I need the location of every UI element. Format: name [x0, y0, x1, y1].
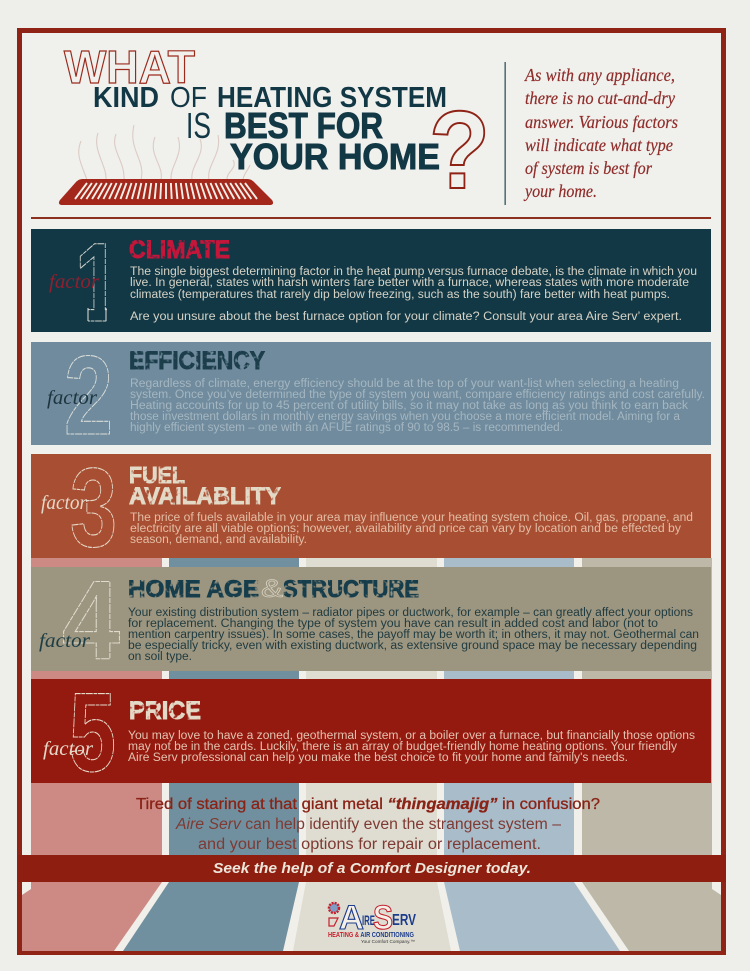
- closing line 2: Aire Serv can help identify even the strangest system –: [175, 816, 561, 833]
- intro text: there is no cut-and-dry: [525, 88, 675, 108]
- body text: [128, 730, 695, 764]
- body text: [130, 378, 705, 434]
- panel: factor 4 home age and structure: [31, 558, 711, 683]
- intro text: answer. Various factors: [525, 112, 678, 132]
- body text: Aire Serv professional can help you make the best choice to fit your home and family's needs.: [128, 752, 628, 764]
- icon: duct shape: [329, 918, 338, 926]
- wordmark: ERV: [392, 912, 416, 929]
- header rule: [31, 217, 711, 219]
- number 4: 4: [62, 558, 120, 683]
- body text: those investment dollars in monthly energy savings when you choose a more efficient model. Aiming for a: [130, 411, 681, 423]
- title line: is best for: IS: [186, 105, 211, 146]
- intro text: As with any appliance,: [524, 65, 675, 85]
- wordmark: [339, 899, 416, 937]
- title line: is best for: BEST FOR: [224, 105, 383, 146]
- body text: Are you unsure about the best furnace option for your climate? Consult your area Aire Serv’ expert.: [130, 311, 682, 323]
- title line: your home: YOUR HOME: [230, 136, 440, 177]
- body text: [128, 607, 699, 663]
- body text: [130, 266, 697, 323]
- call to action banner: Seek the help of a Comfort Designer today.: [213, 860, 531, 877]
- number 3: 3: [70, 445, 117, 570]
- body text: The single biggest determining factor in the heat pump versus furnace debate, is the climate in which you: [130, 266, 697, 278]
- body text: may not be in the cards. Luckily, there is an array of budget-friendly home heating options. Your friendly: [128, 741, 677, 753]
- panel: factor 3 fuel availability: [31, 445, 711, 570]
- body text: Heating accounts for up to 45 percent of utility bills, so it may not take as long as you think to earn back: [130, 400, 688, 412]
- number 2: 2: [64, 333, 113, 458]
- body text: The price of fuels available in your area may influence your heating system choice. Oil, gas, propane, and: [130, 512, 693, 524]
- body text: season, demand, and availability.: [130, 534, 307, 546]
- body text: You may love to have a zoned, geothermal system, or a boiler over a furnace, but financially those options: [128, 730, 695, 742]
- heading: &: [261, 575, 283, 603]
- heading: AVAILABLITY: [129, 483, 281, 510]
- logo tagline: HEATING & AIR CONDITIONING: [328, 932, 414, 939]
- intro text: [523, 65, 678, 201]
- number 5: 5: [69, 670, 116, 795]
- body text: for replacement. Changing the type of system you have can result in added cost and labor (not to: [128, 618, 658, 630]
- icon: floor vent grate: [59, 179, 273, 205]
- title line: kind of heating system: HEATING SYSTEM: [217, 82, 447, 114]
- heading: EFFICIENCY: [129, 347, 265, 375]
- body text: Regardless of climate, energy efficiency should be at the top of your want-list when selecting a heating: [130, 378, 679, 390]
- icon: gear: [329, 903, 339, 913]
- title: [64, 41, 490, 212]
- title word: WHAT: WHAT: [64, 41, 195, 93]
- closing question text: [136, 796, 600, 853]
- closing line 1: Tired of staring at that giant metal “thingamajig” in confusion?: [136, 796, 600, 813]
- logo: Aire Serv: [328, 899, 416, 944]
- heading: PRICE: [129, 697, 201, 725]
- background stripes: [22, 558, 721, 951]
- wordmark: IRE: [362, 912, 375, 928]
- heading: STRUCTURE: [283, 576, 419, 603]
- title question mark: ?: [429, 89, 490, 212]
- body text: system. Once you’ve determined the type of system you want, compare efficiency ratings and cost carefully.: [130, 389, 705, 401]
- number 1: [80, 243, 107, 322]
- title line: kind of heating system: OF: [170, 82, 207, 114]
- number 1: 1: [75, 220, 121, 345]
- title line: kind of heating system: [93, 82, 447, 114]
- call to action banner: [18, 855, 726, 882]
- logo slogan: Your Comfort Company.™: [361, 939, 415, 944]
- body text: on soil type.: [128, 651, 192, 663]
- factor label: factor: [47, 387, 97, 409]
- panel: factor 2 efficiency: [31, 333, 711, 458]
- panel: factor 5 price: [31, 670, 711, 795]
- wordmark: A: [339, 899, 364, 937]
- wordmark: S: [373, 899, 393, 937]
- divider next to intro: [504, 62, 506, 205]
- factor label: factor: [39, 630, 90, 652]
- factor label: factor: [49, 271, 99, 293]
- closing line 3: and your best options for repair or replacement.: [198, 836, 541, 853]
- heading: [129, 462, 281, 510]
- intro text: will indicate what type: [525, 135, 673, 155]
- heading: HOME AGE: [128, 576, 259, 603]
- body text: mention carpentry issues). In some cases, the payoff may be worth it; in others, it may not. Geothermal can: [128, 629, 699, 641]
- intro text: of system is best for: [525, 158, 653, 178]
- body text: [130, 512, 693, 546]
- body text: climates (temperatures that rarely dip below freezing, such as the south) fare better with heat pumps.: [130, 289, 670, 301]
- body text: electricity are all viable options; however, availability and price can vary by location and be effected by: [130, 523, 681, 535]
- factor label: factor: [43, 738, 93, 760]
- body text: Your existing distribution system – radiator pipes or ductwork, for example – can greatly affect your options: [128, 607, 693, 619]
- body text: highly efficient system – one with an AFUE ratings of 90 to 98.5 – is recommended.: [130, 422, 563, 434]
- title line: kind of heating system: KIND: [93, 82, 159, 114]
- heading: [128, 575, 419, 603]
- panel: factor 1 climate: [31, 229, 711, 332]
- icon: steam rising from vent: [79, 125, 250, 180]
- body text: be especially tricky, even with existing ductwork, as extensive ground space may be necessary depending: [128, 640, 697, 652]
- intro text: your home.: [523, 181, 597, 201]
- heading: FUEL: [129, 462, 185, 488]
- factor label: factor: [41, 492, 87, 514]
- body text: live. In general, states with harsh winters fare better with a furnace, whereas states with more moderate: [130, 277, 689, 289]
- heading: CLIMATE: [129, 236, 230, 264]
